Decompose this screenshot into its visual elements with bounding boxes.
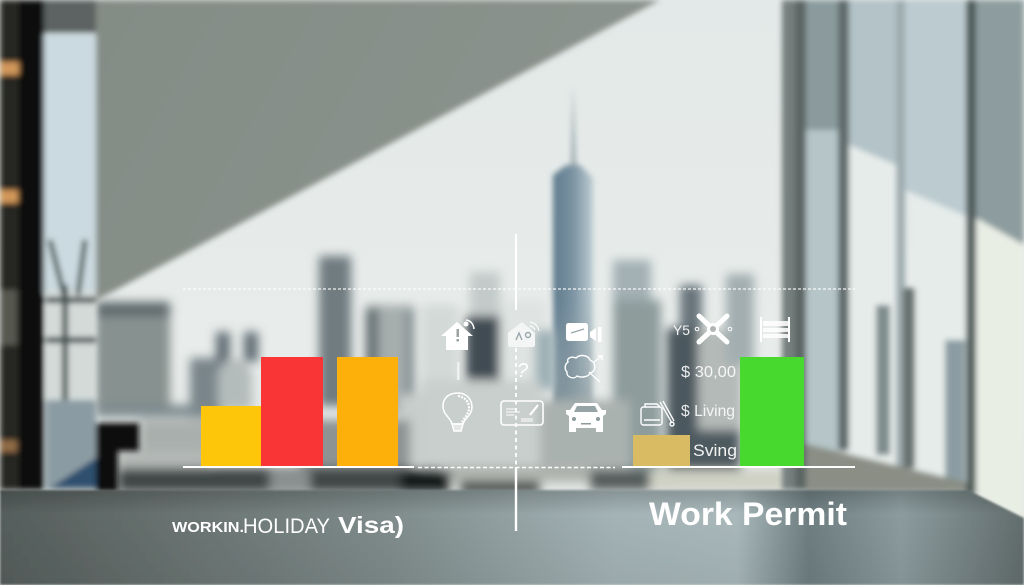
title: work permit: Work Permit — [649, 496, 847, 532]
baseline — [183, 466, 414, 468]
icon: house with symbols — [508, 322, 539, 347]
bar: orange — [337, 357, 398, 467]
icon: rack — [760, 317, 790, 342]
icon: car — [566, 403, 606, 432]
icon: house with alert — [441, 320, 474, 350]
icon: thought cloud — [565, 356, 602, 382]
title: working holiday visa: Visa) — [338, 512, 404, 538]
label: $ Living: $ Living — [681, 403, 735, 420]
left bar chart: working holiday visa — [183, 357, 414, 468]
table top — [0, 490, 1024, 585]
right bar chart: work permit — [622, 357, 855, 468]
icon: luggage — [641, 401, 674, 426]
label: $ 30,00: $ 30,00 — [681, 364, 736, 381]
label: Sving: Sving — [693, 441, 737, 460]
bar: green — [740, 357, 804, 467]
ceiling shadow wedge — [96, 0, 660, 300]
icon: drone cross — [695, 316, 732, 342]
baseline — [622, 466, 855, 468]
dashed guide lines — [183, 234, 855, 531]
icon: vertical bar — [457, 362, 460, 380]
label: Y5: Y5 — [673, 322, 690, 338]
title: working holiday visa: WORKIN. — [172, 519, 244, 536]
title: working holiday visa: HOLIDAY — [243, 515, 330, 538]
icon: video camera — [566, 323, 602, 342]
icon: light bulb — [443, 393, 472, 431]
bar: red — [261, 357, 323, 467]
title: working holiday visa — [172, 512, 404, 538]
bar: tan — [633, 435, 690, 467]
icon: question mark: ? — [517, 360, 529, 382]
icon: cheque card — [501, 401, 543, 425]
bar: yellow — [201, 406, 261, 467]
